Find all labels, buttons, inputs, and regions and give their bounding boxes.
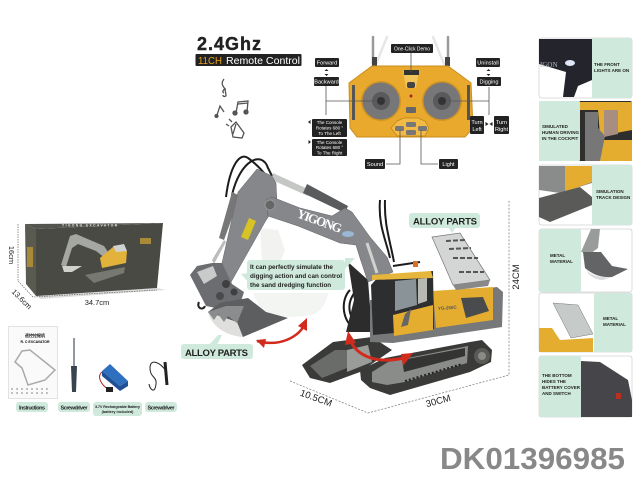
product code: DK01396985 (440, 441, 625, 476)
remote labels: Left (472, 127, 482, 133)
screwdriver (71, 338, 77, 392)
stick arm (222, 169, 277, 284)
panel: cockpit (539, 101, 632, 161)
remote labels: Rotates 680 ° (316, 145, 343, 150)
title: 2.4Ghz 11CH Remote Control: 2.4Ghz (197, 34, 261, 54)
panel: product box with dimensions (7, 223, 166, 311)
red rotation arrow (349, 336, 408, 360)
instructions booklet: 遥控挖掘机 (25, 332, 45, 338)
callout: simulate digging (241, 258, 355, 290)
remote labels: The Console (317, 140, 343, 145)
dimension lines and sizes (290, 200, 522, 413)
panel: cockpit: HUMAN DRIVING (542, 130, 579, 135)
panel: front lights: THE FRONT (594, 62, 620, 67)
dimension lines and sizes: 24CM (511, 264, 522, 290)
dimension lines and sizes: 30CM (425, 393, 452, 410)
panel: product box with dimensions: 34.7cm (85, 298, 109, 307)
cylinder on boom (272, 173, 310, 196)
box front face (36, 223, 163, 296)
rear yellow housing (433, 287, 493, 328)
panel: battery cover bottom (539, 356, 632, 417)
box dimension lines (18, 224, 157, 297)
accessory labels: Screwdriver (60, 406, 88, 412)
title: 2.4Ghz 11CH Remote Control: 11CH (198, 56, 222, 67)
panel: metal bucket: METAL (550, 253, 565, 258)
panel: track design: TRACK DESIGN (596, 195, 630, 200)
callout: simulate digging: the sand dredging function (250, 282, 331, 289)
panel: metal cover (539, 293, 632, 352)
box excavator picture (61, 234, 127, 283)
remote labels: Digging (480, 80, 498, 86)
panel: metal bucket (539, 229, 632, 292)
boom root pillar (346, 262, 372, 332)
panel: accessories (8, 326, 177, 416)
remote details (352, 70, 470, 136)
bucket (208, 298, 288, 337)
icon: music notes and speaker (215, 79, 248, 138)
battery (100, 364, 128, 392)
panel: product box with dimensions: YIGONG EXCAVATOR (62, 224, 118, 228)
panel: remote control diagram (308, 37, 509, 169)
remote labels: Light (442, 162, 455, 168)
hoses (226, 157, 420, 330)
ghost arm and bucket (252, 228, 328, 318)
panel: battery cover bottom: HIDES THE (542, 379, 566, 384)
remote labels: To The Left (318, 131, 341, 136)
panel: track design: SIMULATION (596, 189, 624, 194)
panel: battery cover bottom: AND SWITCH (542, 391, 571, 396)
upper body grey (370, 287, 503, 343)
panel: product box with dimensions: 16cm (7, 246, 16, 264)
remote labels: Sound (367, 162, 383, 168)
main boom (266, 197, 393, 282)
panel: front lights: IGON (540, 61, 558, 69)
accessory labels: (battery included) (102, 410, 134, 414)
panel: metal cover: MATERIAL (603, 322, 626, 327)
panel: battery cover bottom: BATTERY COVER (542, 385, 581, 390)
remote labels: Backward (314, 80, 339, 86)
arrowheads (256, 318, 307, 348)
panel: front lights: LIGHTS ARE ON (594, 68, 629, 73)
remote labels: One-Click Demo (394, 46, 430, 52)
connector lines (326, 53, 489, 164)
usb cable (149, 362, 167, 390)
remote labels: To The Right (317, 150, 343, 156)
panel: front lights (539, 38, 632, 98)
accessory labels (16, 402, 177, 416)
remote labels: Uninstall (477, 60, 499, 66)
panel: battery cover bottom: THE BOTTOM (542, 373, 572, 378)
operating red arrow left (257, 322, 306, 343)
accessory labels: Screwdriver (148, 406, 175, 412)
remote antennas (372, 37, 450, 66)
front crawler track (360, 340, 492, 395)
YIGONG text: YIGONG (295, 206, 344, 236)
illustration: excavator (190, 157, 503, 395)
boom light (342, 231, 354, 237)
callout: alloy parts cover: ALLOY PARTS (413, 216, 477, 228)
callout: alloy parts bucket: ALLOY PARTS (185, 348, 248, 359)
remote body (349, 66, 473, 137)
remote labels: Right (495, 127, 508, 133)
accessory labels: 3.7V Rechargeable Battery (95, 405, 141, 409)
panel: metal cover: METAL (603, 316, 618, 321)
callout: simulate digging: digging action and can control (250, 273, 342, 280)
cab (371, 261, 434, 336)
panel: cockpit: IN THE COCKPIT (542, 136, 579, 141)
warning decal (241, 218, 256, 240)
title: 2.4Ghz 11CH Remote Control: Remote Control (226, 56, 300, 67)
remote labels: The Console (317, 120, 343, 125)
callout: alloy parts cover (409, 213, 480, 233)
remote labels (308, 44, 509, 169)
remote labels: Rotates 680 ° (316, 126, 343, 130)
bucket linkage (190, 263, 244, 310)
callout: simulate digging: It can perfectly simulate the (250, 264, 333, 271)
remote labels: Turn (496, 120, 507, 126)
callout: alloy parts bucket (181, 335, 253, 359)
title: 2.4Ghz 11CH Remote Control (196, 34, 302, 67)
panel: cockpit: SIMULATED (542, 124, 569, 129)
box shadow (36, 288, 166, 299)
accessory labels: Instructions (19, 406, 45, 412)
left joystick (361, 81, 401, 121)
battery cover (432, 233, 490, 290)
instructions booklet: R. C EXCAVATOR (20, 340, 50, 344)
panel: track design (539, 165, 632, 225)
remote labels: Turn (471, 120, 483, 126)
panel: product box with dimensions: 13.6cm (10, 287, 34, 311)
right joystick (422, 81, 462, 121)
remote labels: Forward (317, 60, 337, 66)
illustration: excavator: YG-250C (438, 305, 458, 311)
rear crawler track (302, 337, 392, 383)
panel: metal bucket: MATERIAL (550, 259, 573, 264)
box side face (25, 224, 36, 296)
dimension lines and sizes: 10.5CM (298, 388, 333, 410)
instructions booklet (8, 326, 58, 398)
